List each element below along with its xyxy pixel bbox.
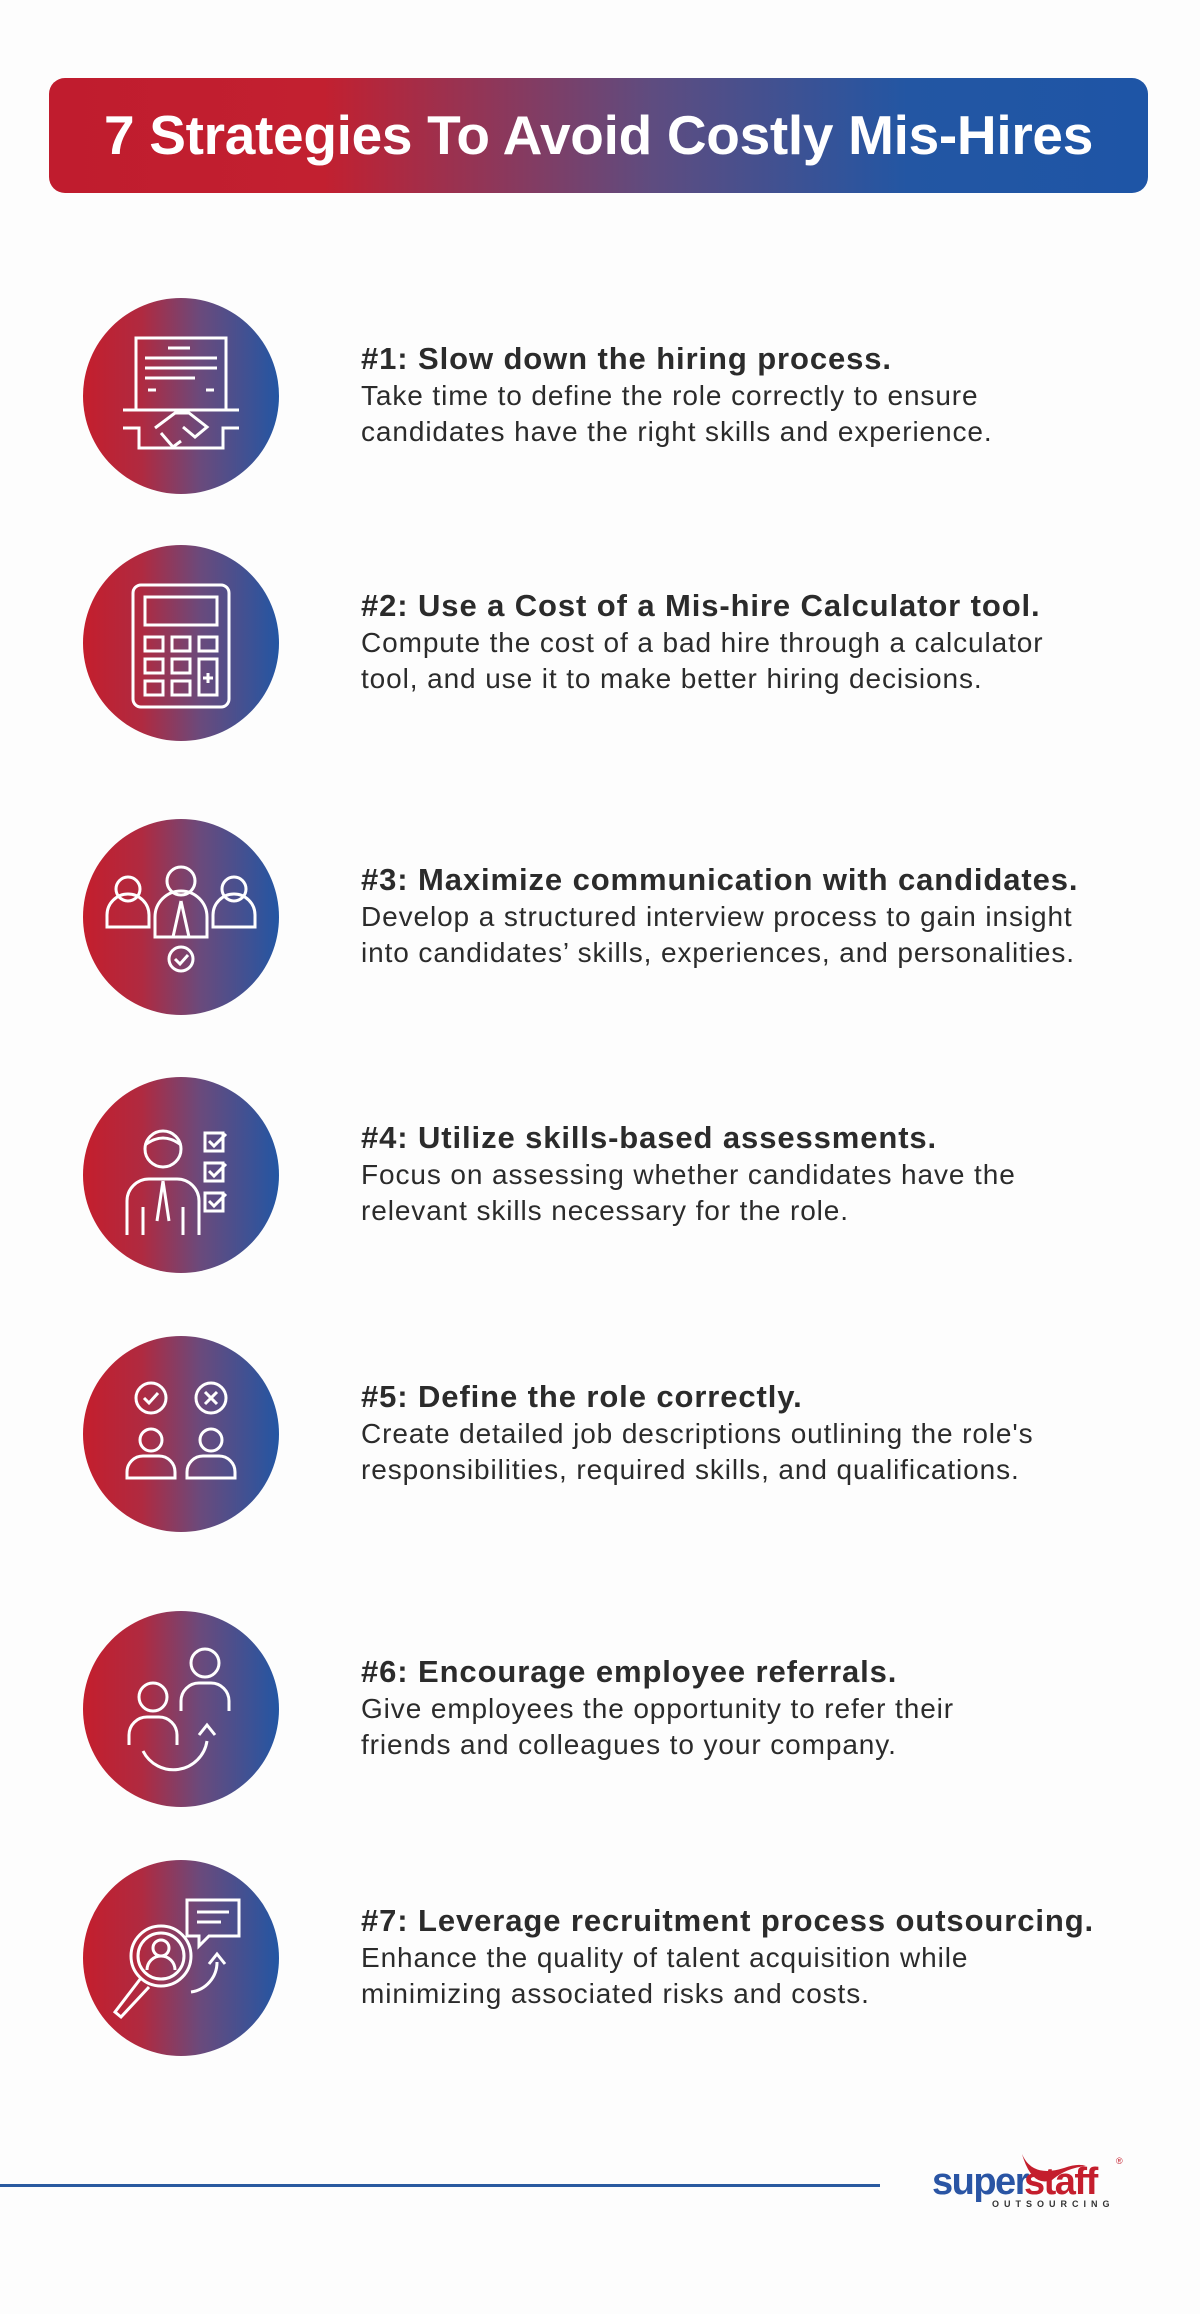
- logo: superstaff outsourcing: ®: [1116, 2156, 1123, 2166]
- text 5: Create detailed job descriptions outlining the role's: [361, 1418, 1034, 1449]
- item 1: [83, 298, 993, 494]
- text 1: candidates have the right skills and experience.: [361, 416, 993, 447]
- text 3: into candidates’ skills, experiences, and personalities.: [361, 937, 1075, 968]
- text 4: relevant skills necessary for the role.: [361, 1195, 849, 1226]
- text 2: Compute the cost of a bad hire through a calculator: [361, 627, 1044, 658]
- item 3: [83, 819, 1078, 1015]
- text 4: [361, 1120, 1016, 1226]
- title: [49, 78, 1148, 193]
- text 3: #3: Maximize communication with candidates.: [361, 862, 1078, 897]
- text 4: Focus on assessing whether candidates have the: [361, 1159, 1016, 1190]
- icon: contract handshake: [83, 298, 279, 494]
- text 6: [361, 1654, 954, 1760]
- icon: calculator: [83, 545, 279, 741]
- text 6: friends and colleagues to your company.: [361, 1729, 897, 1760]
- icon: referral: [83, 1611, 279, 1807]
- text 7: [361, 1903, 1094, 2009]
- icon: candidates: [83, 819, 279, 1015]
- text 5: responsibilities, required skills, and qualifications.: [361, 1454, 1020, 1485]
- item 4: [83, 1077, 1016, 1273]
- title: 7 Strategies To Avoid Costly Mis-Hires: [104, 104, 1093, 166]
- text 5: #5: Define the role correctly.: [361, 1379, 803, 1414]
- item 7: [83, 1860, 1094, 2056]
- text 6: Give employees the opportunity to refer their: [361, 1693, 954, 1724]
- text 3: Develop a structured interview process to gain insight: [361, 901, 1073, 932]
- icon: magnifier outsourcing: [83, 1860, 279, 2056]
- item 6: [83, 1611, 954, 1807]
- text 6: #6: Encourage employee referrals.: [361, 1654, 897, 1689]
- logo: superstaff outsourcing: staff: [1024, 2161, 1099, 2203]
- text 5: [361, 1379, 1034, 1485]
- text 4: #4: Utilize skills-based assessments.: [361, 1120, 937, 1155]
- text 1: Take time to define the role correctly to ensure: [361, 380, 978, 411]
- text 1: [361, 341, 993, 447]
- text 3: [361, 862, 1078, 968]
- text 2: [361, 588, 1044, 694]
- text 7: #7: Leverage recruitment process outsourcing.: [361, 1903, 1094, 1938]
- text 1: #1: Slow down the hiring process.: [361, 341, 892, 376]
- icon: skills assessment: [83, 1077, 279, 1273]
- logo: superstaff outsourcing: OUTSOURCING: [992, 2199, 1114, 2209]
- item 2: [83, 545, 1044, 741]
- item 5: [83, 1336, 1034, 1532]
- logo: superstaff outsourcing: super: [932, 2161, 1030, 2203]
- icon: approve reject: [83, 1336, 279, 1532]
- logo: superstaff outsourcing: [932, 2154, 1123, 2209]
- text 7: Enhance the quality of talent acquisition while: [361, 1942, 968, 1973]
- text 7: minimizing associated risks and costs.: [361, 1978, 870, 2009]
- text 2: tool, and use it to make better hiring decisions.: [361, 663, 983, 694]
- text 2: #2: Use a Cost of a Mis-hire Calculator tool.: [361, 588, 1041, 623]
